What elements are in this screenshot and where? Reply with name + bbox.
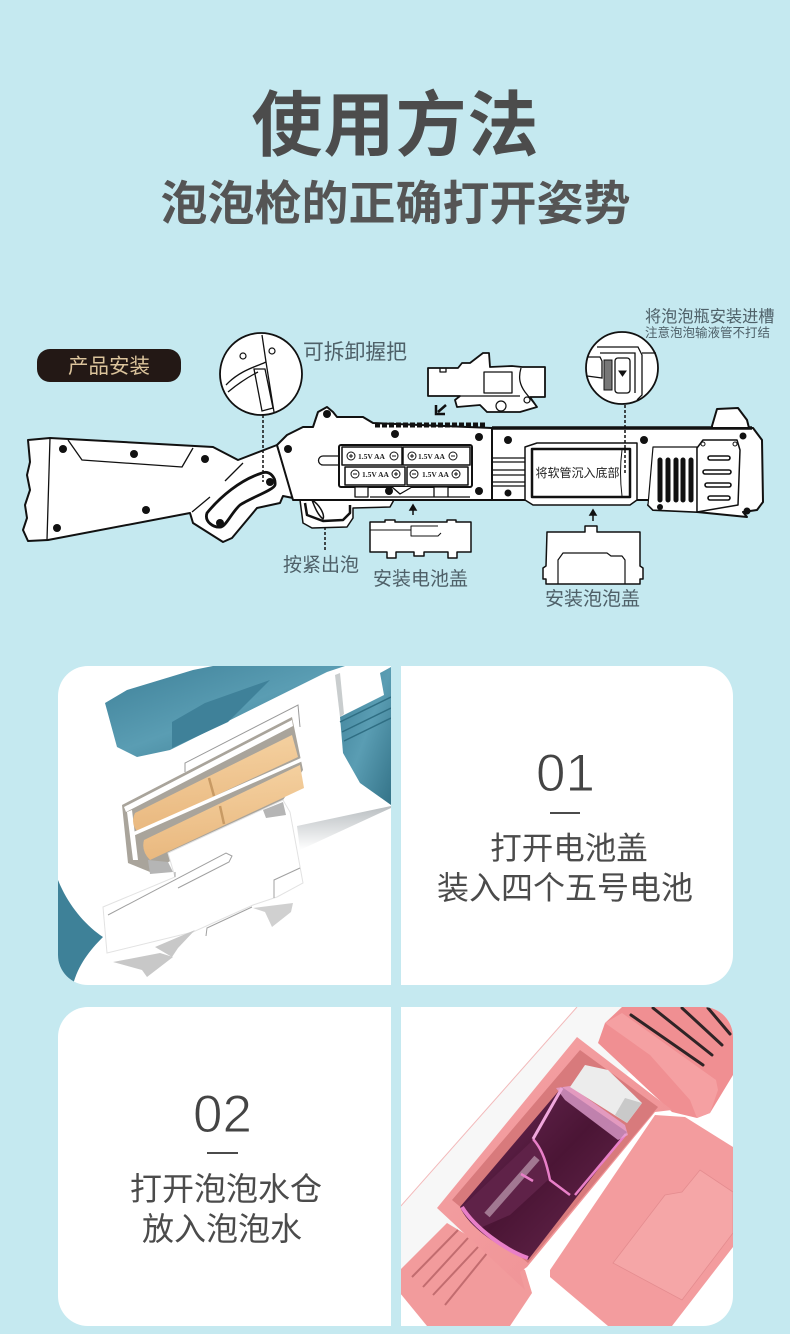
panel: step 2 photo — [400, 1007, 733, 1326]
top rail — [375, 422, 485, 428]
title: 使用方法 — [251, 87, 540, 166]
receiver body — [277, 407, 492, 500]
bolt and cocking slot — [318, 456, 339, 465]
muzzle in teal — [340, 667, 391, 805]
battery cover — [370, 520, 471, 558]
battery bay: 1.5V AA — [358, 452, 386, 461]
bubble bay: 将软管沉入底部 — [535, 465, 620, 480]
bay latches — [355, 487, 470, 497]
bubble bay — [525, 443, 637, 505]
trigger — [312, 500, 323, 519]
panel: step 1 text card: 打开电池盖 — [490, 830, 648, 866]
label: tube note: 注意泡泡输液管不打结 — [645, 325, 770, 340]
bottle cap — [570, 1065, 642, 1123]
detail circle: detachable grip — [220, 333, 302, 482]
bubble cover — [543, 526, 643, 584]
label: install bottle: 将泡泡瓶安装进槽 — [645, 308, 774, 326]
scope accessory — [428, 353, 545, 412]
panel: step 1 photo — [58, 666, 391, 985]
label: detachable grip: 可拆卸握把 — [303, 341, 407, 364]
body shading — [297, 806, 391, 845]
label: install battery cover: 安装电池盖 — [373, 568, 468, 590]
subtitle: 泡泡枪的正确打开姿势 — [160, 177, 630, 230]
screws — [53, 410, 750, 532]
battery bay: 1.5V AA — [418, 452, 446, 461]
panel: step 2 text card: 02 — [193, 1085, 252, 1144]
panel: step 1 text card — [401, 666, 733, 985]
arrow: scope to rail — [436, 405, 446, 414]
body inner edge — [335, 673, 344, 717]
batteries — [131, 735, 304, 860]
stock in teal — [58, 880, 103, 985]
panel: step 2 text card: 打开泡泡水仓 — [130, 1171, 322, 1207]
bubble lid — [550, 1115, 733, 1326]
panel: step 1 text card: 装入四个五号电池 — [437, 870, 693, 906]
frame — [437, 1037, 672, 1290]
arrow: battery cover — [410, 505, 416, 515]
panel: step 1 text card: 01 — [536, 744, 595, 803]
panel: step 2 text card — [58, 1007, 391, 1326]
battery cover piece — [103, 800, 303, 977]
battery bay: 1.5V AA — [362, 470, 390, 479]
bottle — [460, 1065, 642, 1260]
trigger guard inner — [305, 503, 350, 521]
stock — [23, 438, 293, 542]
scope in teal — [105, 666, 345, 757]
battery compartment — [122, 717, 303, 872]
badge: product installation: 产品安装 — [68, 355, 150, 378]
muzzle base — [598, 1007, 733, 1118]
label: press for bubbles: 按紧出泡 — [283, 554, 359, 576]
muzzle grille — [648, 447, 697, 512]
badge: product installation — [37, 349, 181, 382]
lower handle — [400, 1223, 532, 1326]
muzzle collar — [697, 440, 740, 512]
battery bay — [339, 445, 472, 487]
panel: step 2 text card: 放入泡泡水 — [142, 1211, 302, 1247]
arrow: bubble cover — [590, 510, 596, 521]
grip opening — [206, 472, 275, 527]
trigger guard — [300, 498, 395, 528]
muzzle vents — [631, 1008, 730, 1065]
barrel ribs — [492, 458, 525, 486]
muzzle ring — [605, 1013, 718, 1118]
main barrel — [492, 428, 763, 517]
detail circle: bottle slot — [586, 332, 658, 473]
gun line diagram — [23, 407, 763, 542]
label: press for bubbles — [283, 527, 359, 576]
stock cheek rest — [47, 438, 243, 540]
label: install bubble cover: 安装泡泡盖 — [545, 588, 640, 610]
cavity — [452, 1050, 658, 1263]
front sight — [712, 408, 749, 428]
battery bay: 1.5V AA — [422, 470, 450, 479]
